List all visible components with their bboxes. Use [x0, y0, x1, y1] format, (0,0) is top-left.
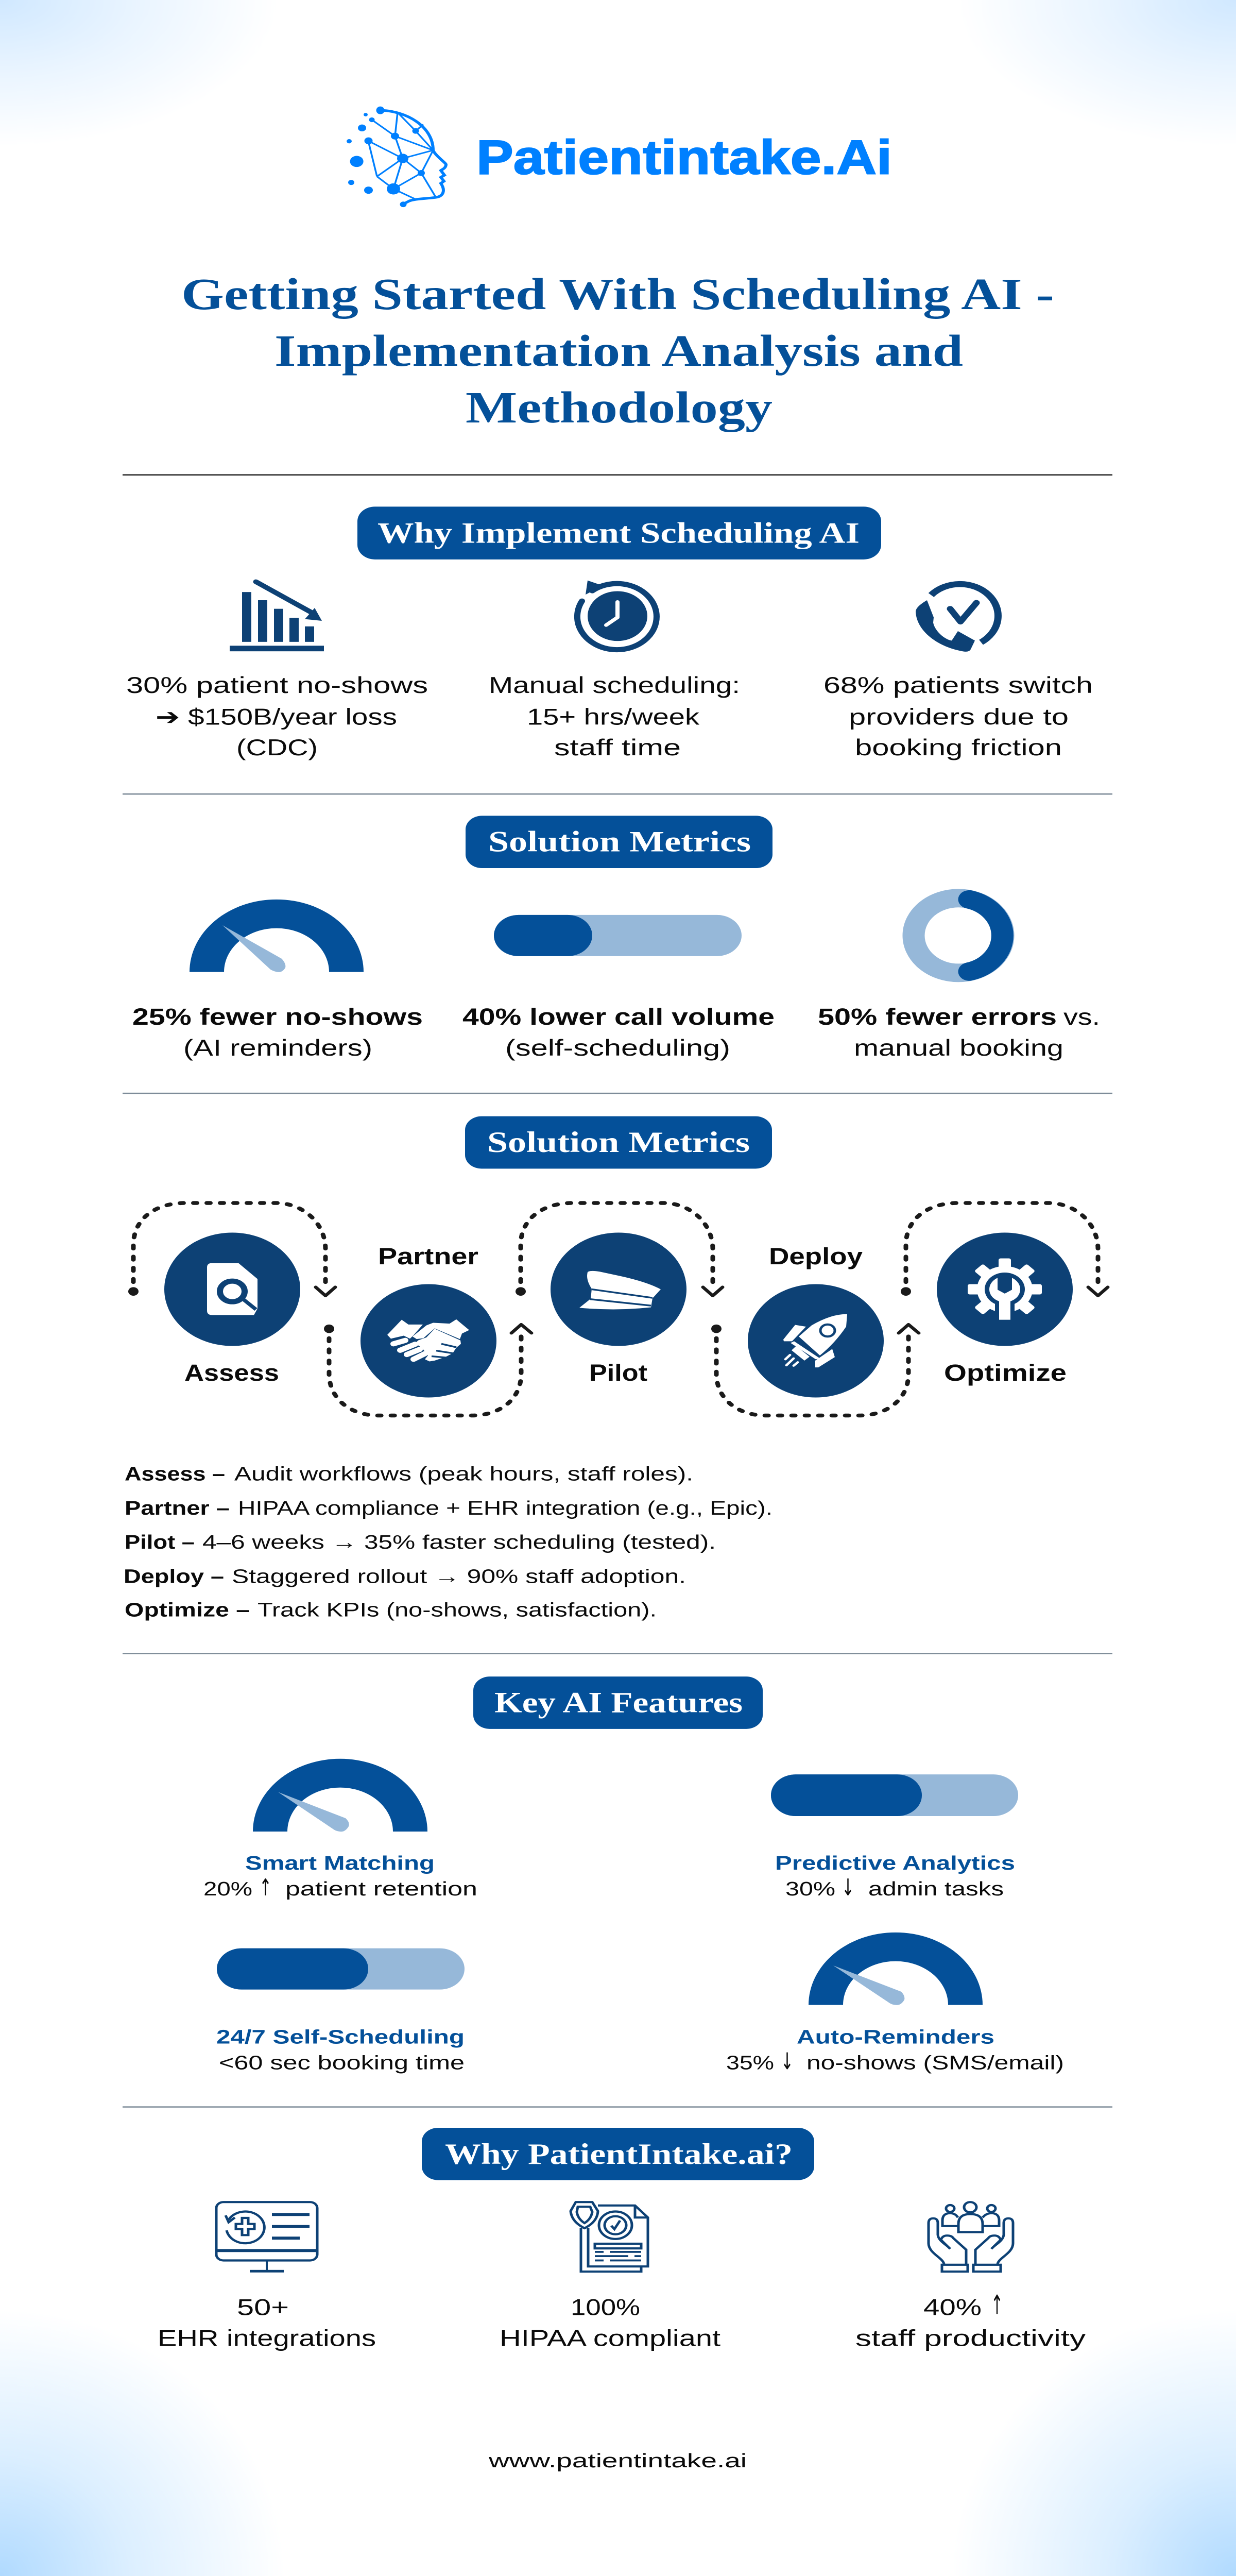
- text: no-shows: ➔ $150B/year loss: [156, 705, 397, 730]
- icon: gear wrench: [937, 1232, 1073, 1346]
- heading pill: [465, 1116, 772, 1168]
- step descriptions: HIPAA compliance + EHR integration (e.g., Epic).: [238, 1497, 772, 1519]
- text: auto-reminders: 35%: [726, 2052, 774, 2074]
- icon: falling bar chart: [230, 582, 324, 651]
- panel: key AI features: [203, 1676, 1064, 2075]
- text: smart matching: [203, 1852, 477, 1901]
- bar: self-scheduling: [217, 1948, 465, 1990]
- step descriptions: [124, 1463, 772, 1621]
- icon: handshake: [360, 1284, 496, 1397]
- text: productivity: 40%: [923, 2295, 982, 2320]
- step descriptions: Deploy –: [124, 1565, 224, 1587]
- step descriptions: Partner –: [125, 1497, 230, 1519]
- icon: HIPAA document: [571, 2202, 648, 2272]
- icon: staff in hands: [929, 2202, 1013, 2272]
- connector 2: [324, 1325, 531, 1416]
- icon: phone check: [916, 584, 998, 652]
- panel: solution metrics: [132, 816, 1100, 1061]
- text: auto-reminders: [726, 2026, 1064, 2075]
- text: smart matching: Smart Matching: [245, 1852, 435, 1874]
- heading pill: Key AI Features: [494, 1686, 743, 1719]
- title: [181, 269, 1054, 432]
- text: errors: [818, 1004, 1100, 1061]
- text: fewer no-shows: (AI reminders): [183, 1036, 372, 1061]
- text: compliant: HIPAA compliant: [500, 2326, 721, 2351]
- text: integrations: [158, 2295, 376, 2351]
- text: no-shows: (CDC): [236, 735, 318, 760]
- gauge: auto-reminders: [809, 1933, 983, 2005]
- donut: [914, 898, 1003, 973]
- heading pill: Solution Metrics: [488, 825, 751, 858]
- connector 3: [516, 1203, 723, 1296]
- text: fewer no-shows: [132, 1004, 423, 1061]
- bar: predictive analytics: [771, 1774, 1018, 1816]
- icon: neural head: [347, 107, 446, 207]
- text: switching: providers due to: [849, 705, 1069, 730]
- step descriptions: Assess –: [125, 1463, 225, 1484]
- panel: why implement: [126, 506, 1093, 760]
- step descriptions: Audit workflows (peak hours, staff roles).: [234, 1463, 693, 1484]
- text: errors: 50% fewer errors: [818, 1004, 1057, 1030]
- text: productivity: ↑: [991, 2290, 1003, 2320]
- logo: [347, 107, 892, 207]
- text: no-shows: 30% patient no-shows: [126, 673, 428, 698]
- text: integrations: 50+: [237, 2295, 289, 2320]
- gauge: [190, 900, 364, 972]
- connector 4: [711, 1325, 919, 1416]
- text: auto-reminders: ↓: [781, 2048, 794, 2075]
- step descriptions: Pilot –: [125, 1531, 195, 1553]
- text: switching: 68% patients switch: [823, 673, 1093, 698]
- text: predictive analytics: ↓: [842, 1874, 854, 1901]
- icon: assess: [164, 1232, 300, 1346]
- text: compliant: [500, 2295, 721, 2351]
- text: productivity: [855, 2290, 1086, 2351]
- gauge: smart matching: [253, 1759, 427, 1832]
- text: switching: booking friction: [855, 735, 1062, 760]
- text: integrations: EHR integrations: [158, 2326, 376, 2351]
- connector 5: [901, 1203, 1108, 1296]
- text: compliant: 100%: [571, 2295, 640, 2320]
- text: manual scheduling: Manual scheduling:: [489, 673, 740, 698]
- panel: process steps: [124, 1116, 1108, 1621]
- step descriptions: 4–6 weeks → 35% faster scheduling (tested).: [202, 1531, 716, 1553]
- title: Getting Started With Scheduling AI -: [181, 269, 1054, 319]
- text: auto-reminders: Auto-Reminders: [797, 2026, 994, 2048]
- icon: EHR monitor: [216, 2202, 317, 2273]
- icon: pilot cap: [551, 1232, 686, 1346]
- title: Methodology: [466, 383, 772, 432]
- label: assess: Assess: [184, 1359, 279, 1386]
- heading pill: [357, 506, 881, 560]
- progress bar: [494, 915, 742, 956]
- text: self-scheduling: [216, 2026, 465, 2074]
- text: smart matching: patient retention: [285, 1878, 477, 1900]
- heading pill: [473, 1676, 763, 1729]
- text: smart matching: ↑: [259, 1874, 272, 1901]
- heading pill: [422, 2128, 814, 2180]
- text: fewer no-shows: 25% fewer no-shows: [132, 1004, 423, 1030]
- heading pill: Why Implement Scheduling AI: [377, 517, 860, 549]
- label: pilot: Pilot: [589, 1359, 647, 1386]
- text: predictive analytics: admin tasks: [868, 1878, 1004, 1900]
- logo wordmark: Patientintake.Ai: [476, 130, 892, 184]
- text: call volume: [462, 1004, 775, 1061]
- text: errors: manual booking: [854, 1036, 1063, 1061]
- heading pill: Solution Metrics: [487, 1126, 750, 1159]
- step descriptions: Track KPIs (no-shows, satisfaction).: [258, 1599, 657, 1621]
- heading pill: Why PatientIntake.ai?: [445, 2138, 793, 2171]
- step descriptions: Staggered rollout → 90% staff adoption.: [232, 1565, 686, 1587]
- text: predictive analytics: 30%: [785, 1878, 835, 1900]
- heading pill: [466, 816, 772, 868]
- text: call volume: 40% lower call volume: [462, 1004, 775, 1030]
- icon: rocket: [748, 1284, 884, 1397]
- text: errors: vs.: [1063, 1005, 1100, 1030]
- text: manual scheduling: [489, 673, 740, 760]
- connector 1: [128, 1203, 335, 1296]
- label: deploy: Deploy: [769, 1243, 863, 1269]
- panel: why patientintake: [158, 2128, 1086, 2351]
- text: switching: [823, 673, 1093, 760]
- text: smart matching: 20%: [203, 1878, 252, 1900]
- text: self-scheduling: <60 sec booking time: [219, 2052, 465, 2074]
- footer url: www.patientintake.ai: [488, 2450, 747, 2471]
- text: predictive analytics: [775, 1852, 1015, 1901]
- text: auto-reminders: no-shows (SMS/email): [806, 2052, 1064, 2074]
- text: call volume: (self-scheduling): [505, 1036, 730, 1061]
- text: self-scheduling: 24/7 Self-Scheduling: [216, 2026, 465, 2048]
- text: manual scheduling: 15+ hrs/week: [527, 705, 700, 730]
- text: no-shows: [126, 673, 428, 760]
- title: Implementation Analysis and: [274, 326, 963, 376]
- text: productivity: staff productivity: [855, 2326, 1086, 2351]
- icon: clock: [577, 581, 657, 650]
- step descriptions: Optimize –: [125, 1599, 250, 1621]
- text: manual scheduling: staff time: [554, 735, 681, 760]
- label: optimize: Optimize: [944, 1359, 1067, 1386]
- label: partner: Partner: [378, 1243, 478, 1269]
- text: predictive analytics: Predictive Analytics: [775, 1852, 1015, 1874]
